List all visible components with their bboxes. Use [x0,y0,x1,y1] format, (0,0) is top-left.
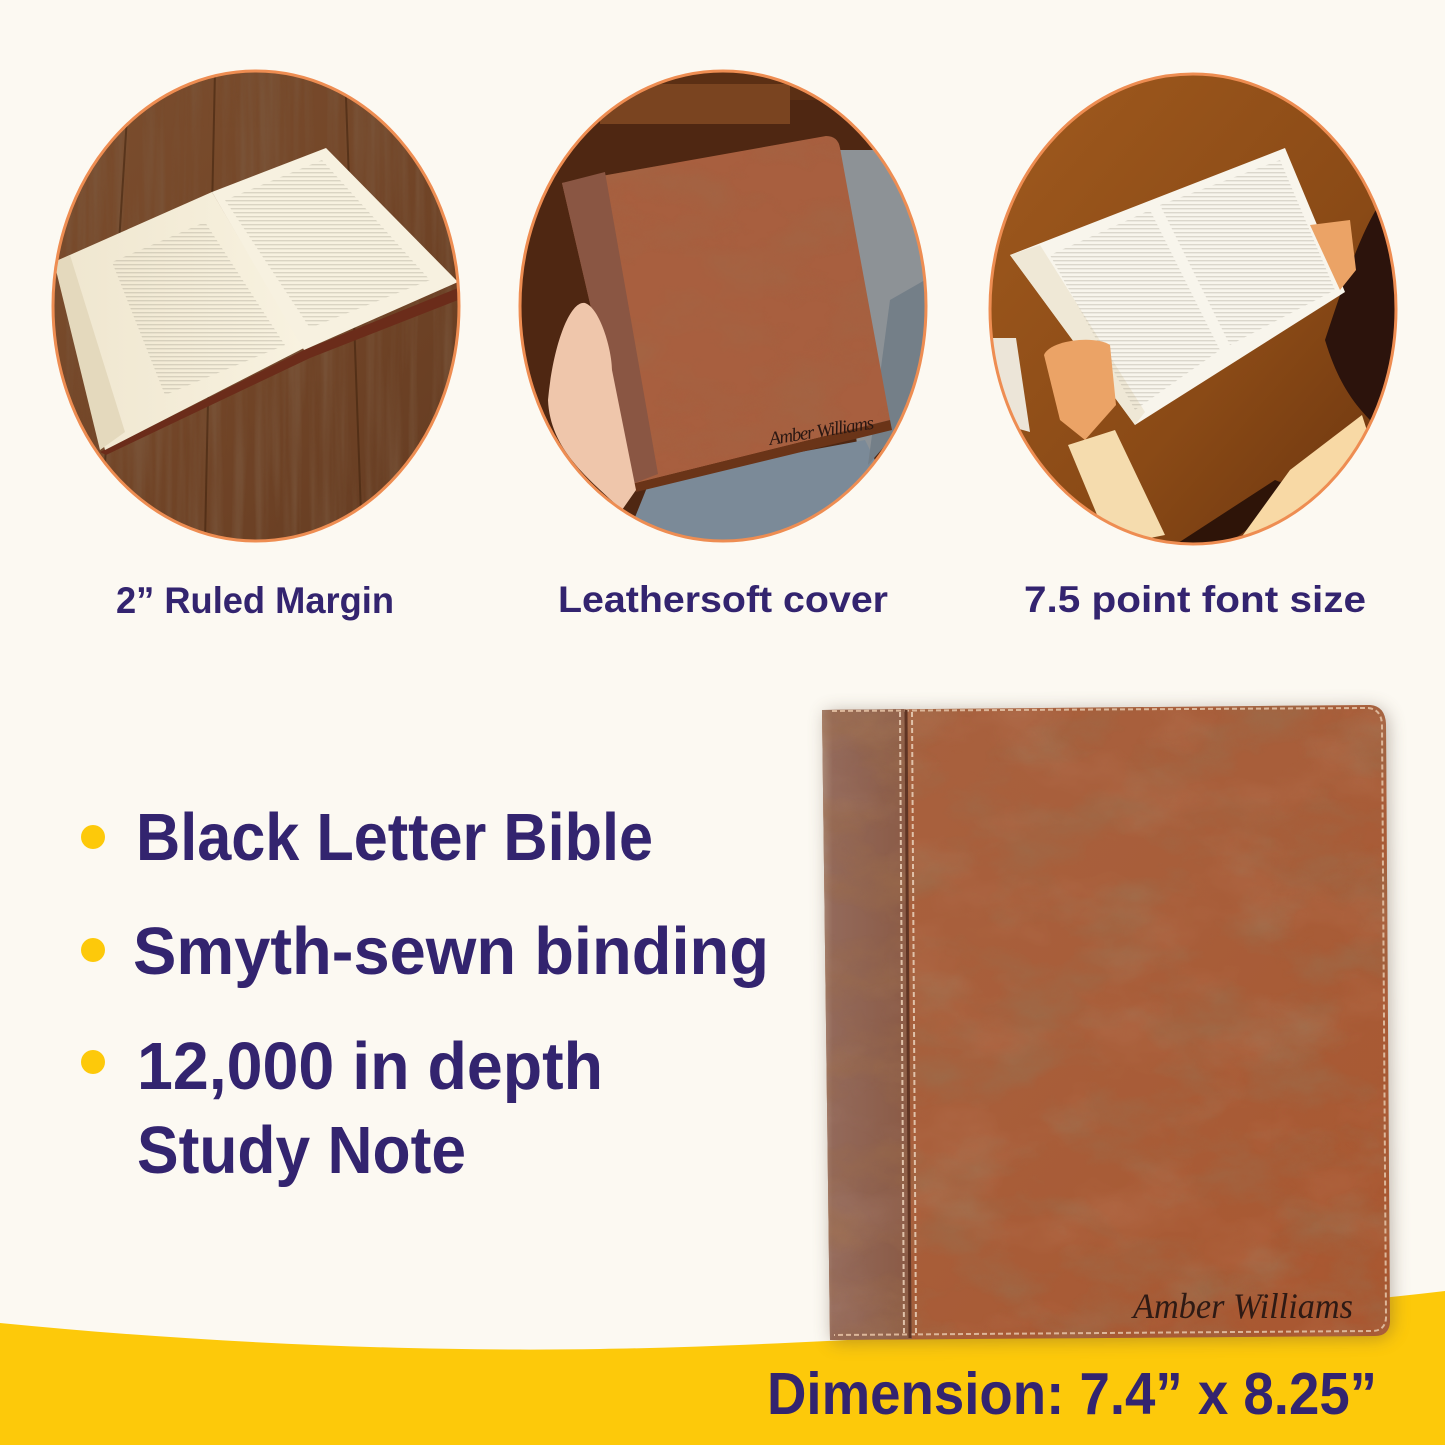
yellow wave band [0,1291,1445,1445]
bullet 3 [81,1050,105,1074]
caption: 2" Ruled Margin: 2” Ruled Margin [116,580,394,621]
photo circle: open bible on wood floor [50,70,462,542]
leather mottling [815,700,1395,1345]
photo circle: reading at wooden table [988,72,1398,546]
feature: Study Note: Study Note [137,1113,466,1188]
book: leather cover [815,700,1395,1345]
dimension label: Dimension: 7.4” x 8.25” [767,1361,1377,1427]
feature: 12,000 in depth: 12,000 in depth [137,1029,603,1104]
stitching [832,708,1386,1335]
spine panel [822,709,912,1340]
feature list [81,800,769,1188]
engraved name: Amber Williams [1131,1286,1353,1326]
book shadow [826,708,1392,1342]
caption: Leathersoft cover: Leathersoft cover [558,579,888,620]
feature: Black Letter Bible: Black Letter Bible [136,800,653,875]
photo circle: leather cover on lap: Amber Williams [766,413,875,450]
bullet 1 [81,825,105,849]
cover base [822,705,1390,1340]
caption: 7.5 point font size: 7.5 point font size [1024,579,1366,620]
feature: Smyth-sewn binding: Smyth-sewn binding [133,914,769,989]
bullet 2 [81,938,105,962]
photo circle: leather cover on lap [518,70,928,542]
